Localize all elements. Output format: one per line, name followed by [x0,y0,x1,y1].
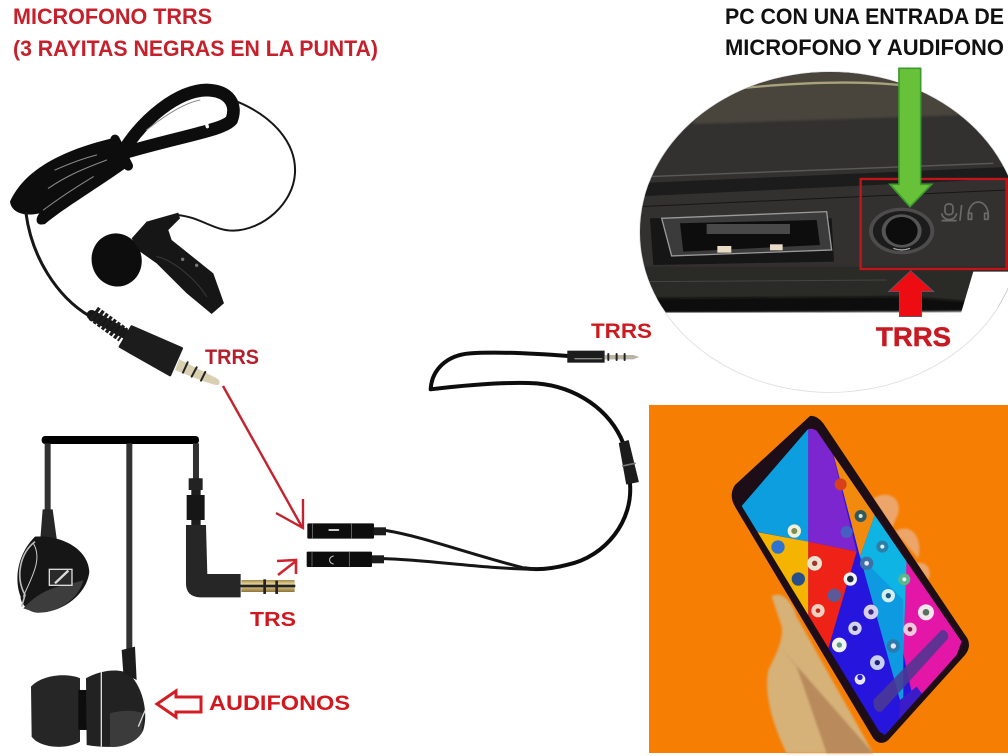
app icons [771,478,934,685]
splitter joint [619,441,638,484]
lower earbud [31,647,145,747]
label: TRS: TRS [250,609,296,631]
arrow: microfono to adapter [223,386,303,528]
angled TRS jack [186,478,295,597]
arrow: TRS to adapter [277,560,296,575]
title: microfono TRRS [13,4,378,61]
label: TRRS adapter: TRRS [591,320,652,343]
lens outline [640,72,1008,392]
USB port [650,212,834,265]
title: PC con entrada: MICROFONO Y AUDIFONO [725,35,1004,60]
thin cable loop [177,102,295,231]
arrow: audifonos [157,691,201,717]
title: PC con entrada [725,4,1004,60]
splitter adapter cable [307,351,639,569]
jack strain relief [92,313,133,338]
title: microfono TRRS: MICROFONO TRRS [13,4,212,29]
mic and headphone icons [942,202,988,221]
earphones photo [17,436,295,747]
audio jack socket [869,208,934,254]
TRRS plug [567,351,605,363]
earphone wires [45,443,199,650]
hand [767,495,930,753]
tie clip [132,213,224,314]
TRRS plug tip [175,359,220,385]
phone photo panel [649,405,1008,753]
label: AUDIFONOS: AUDIFONOS [209,692,350,715]
upper socket [307,523,374,539]
cable to jack [26,213,89,316]
green arrow [890,68,932,207]
laptop body [633,67,1008,399]
upper earbud [17,509,89,613]
microphone cable bundle [10,90,233,224]
black connecting bar [42,436,199,444]
red highlight box [861,179,1007,269]
title: microfono TRRS: (3 RAYITAS NEGRAS EN LA PUNTA) [13,36,378,61]
title: PC con entrada: PC CON UNA ENTRADA DE [725,4,1004,29]
lower cable [525,483,630,569]
main cable [431,353,623,443]
logo square [49,569,72,585]
laptop port photo [633,67,1008,399]
lower socket [307,552,372,567]
label: TRRS microfono: TRRS [205,346,259,369]
phone body [732,416,969,743]
search bar [873,630,948,712]
orange background [649,405,1008,753]
label: TRRS pc: TRRS [876,322,951,352]
jack barrel [120,327,182,375]
red arrow [888,271,934,317]
foam windscreen [86,228,148,292]
lavalier microphone photo [10,90,295,385]
phone screen wallpaper [742,428,962,735]
